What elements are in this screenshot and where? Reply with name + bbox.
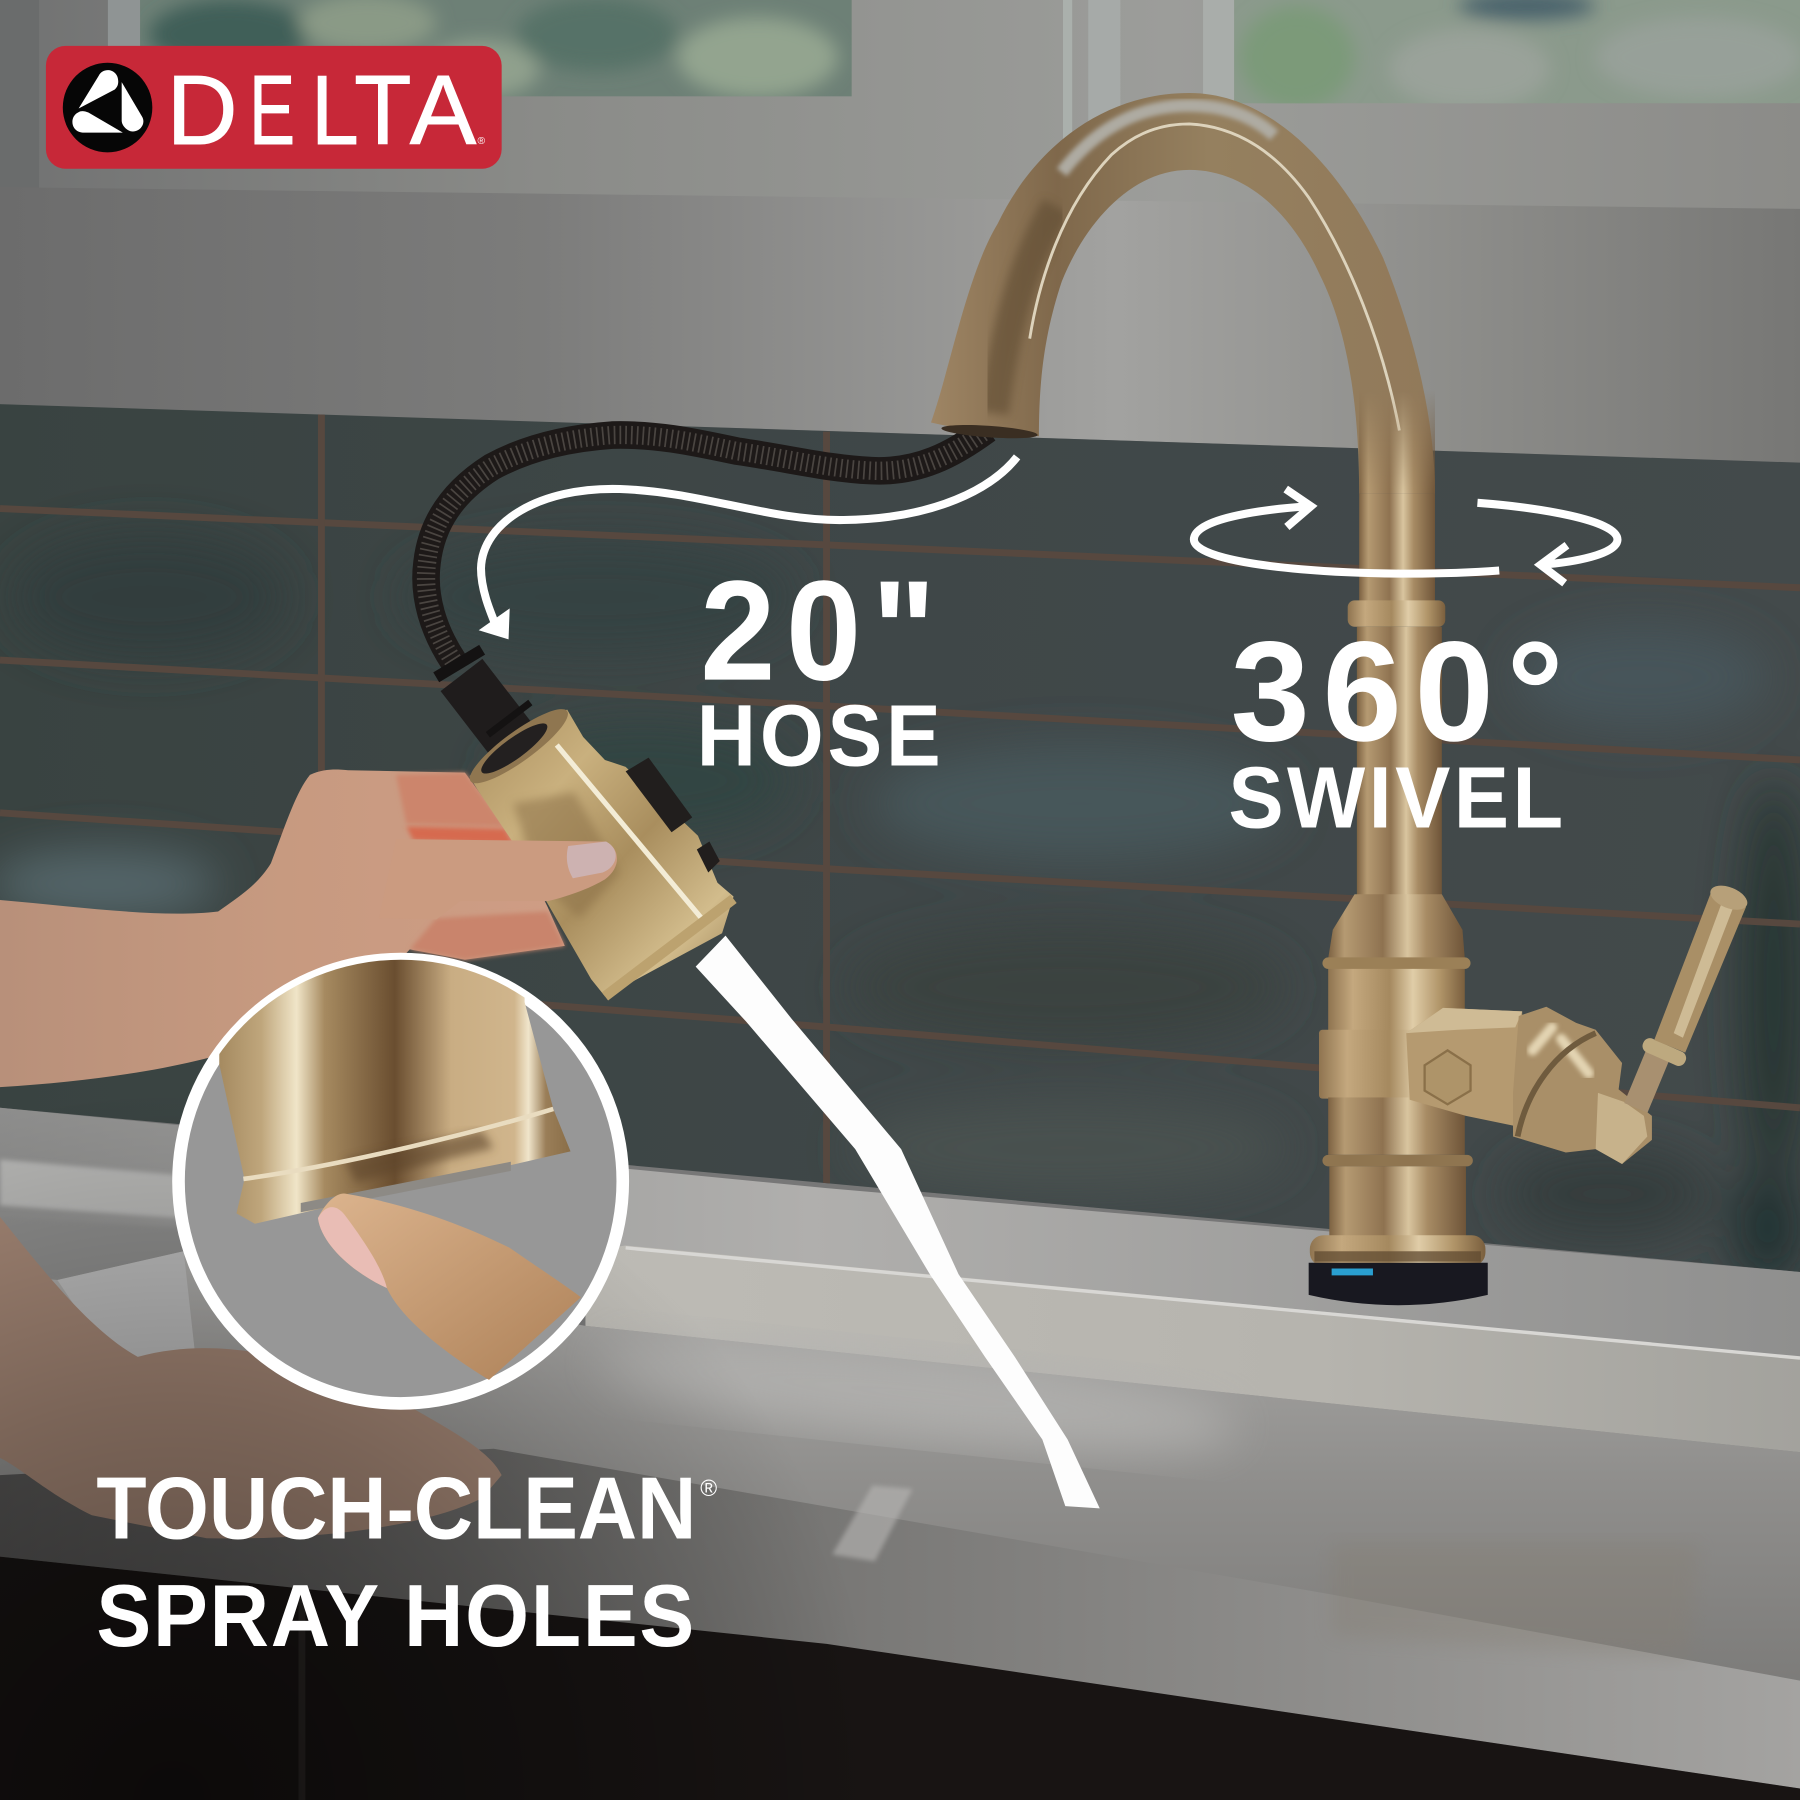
inset: fingernail <box>318 1207 387 1288</box>
logo: wordmark: T <box>354 55 412 165</box>
thumb over spray head <box>379 839 617 920</box>
window view: left trees <box>140 0 852 98</box>
upper hand holding spray head <box>0 770 565 1087</box>
sink reflection highlight <box>594 1316 1243 1474</box>
logo: wordmark: L <box>311 55 359 165</box>
spray holes label: SPRAY HOLES <box>96 1567 694 1666</box>
logo: wordmark: A <box>410 55 477 165</box>
window view: right trees <box>1234 0 1800 109</box>
inset: spray face cylinder <box>219 960 570 1224</box>
tiled backsplash <box>0 404 1800 1286</box>
hose length arrow <box>479 457 1017 639</box>
faucet: handle knob <box>1513 1007 1652 1164</box>
bottom-left vignette <box>0 1091 918 1800</box>
faucet: column collar <box>1348 600 1445 627</box>
upper hand: upper fingers tint <box>396 773 505 827</box>
counter stone front face <box>585 1246 1800 1452</box>
upper hand: lower finger tint <box>410 911 565 960</box>
faucet: body <box>1310 894 1485 1266</box>
spout thin highlight <box>1030 124 1399 430</box>
logo: registered mark: ® <box>478 136 486 147</box>
counter bright edge line <box>626 1248 1800 1358</box>
faucet: lower column <box>1357 627 1442 895</box>
spout dark band <box>994 207 1056 413</box>
registered mark: ® <box>700 1475 717 1501</box>
swivel arrow left <box>1194 489 1499 574</box>
faucet: arm shadow <box>1406 1008 1522 1033</box>
faucet: hose <box>426 429 987 661</box>
faucet: hex bolt <box>1425 1050 1471 1104</box>
logo: wordmark <box>166 55 477 165</box>
water stream <box>696 936 1100 1508</box>
faucet: hose connector <box>436 650 530 740</box>
faucet: handle arm <box>1406 1008 1522 1127</box>
dark cabinet <box>0 1557 1800 1800</box>
inset: spray nozzles <box>301 1162 511 1212</box>
20 inch label: 20" <box>700 551 936 710</box>
inset: rim dark shadow <box>344 1131 494 1182</box>
reflection streak <box>832 1485 913 1561</box>
faucet: touch base <box>1309 1263 1488 1305</box>
thumbnail <box>567 841 616 878</box>
window frame muntins <box>0 0 1234 195</box>
hose label: HOSE <box>697 686 941 784</box>
logo: wordmark: D <box>166 55 238 165</box>
inset: finger <box>318 1193 581 1380</box>
spray head buttons <box>626 758 720 872</box>
swivel label: SWIVEL <box>1228 750 1563 847</box>
touch-clean label: TOUCH-CLEAN <box>96 1460 696 1558</box>
sink basin <box>0 1251 1800 1699</box>
faucet: gooseneck spout and column <box>931 93 1435 608</box>
left sink edge bands <box>0 1159 195 1283</box>
faucet: lever <box>1636 881 1751 1108</box>
spout opening <box>941 423 1038 441</box>
spray head <box>462 699 734 996</box>
left basin corner <box>57 1251 195 1366</box>
Delta logo badge <box>46 46 502 169</box>
inset circle: touch-clean close-up <box>179 918 623 1403</box>
countertop ledge top <box>0 1108 1800 1359</box>
logo: black circle <box>63 63 152 152</box>
logo: wordmark: E <box>249 55 295 165</box>
arch pale reflection <box>1062 106 1274 172</box>
sink front rim <box>0 1449 1800 1789</box>
wall band <box>0 187 1800 463</box>
faucet reflection in sink <box>1332 1544 1699 1659</box>
lower hand and arm <box>0 1217 502 1538</box>
upper hand: finger shadow <box>406 827 513 845</box>
swivel arrow right <box>1477 503 1617 583</box>
background: window frame <box>0 0 1800 212</box>
logo: triangle of teardrops <box>72 70 143 133</box>
inset: rim highlight <box>243 1109 553 1179</box>
360 degree label: 360° <box>1231 612 1564 771</box>
